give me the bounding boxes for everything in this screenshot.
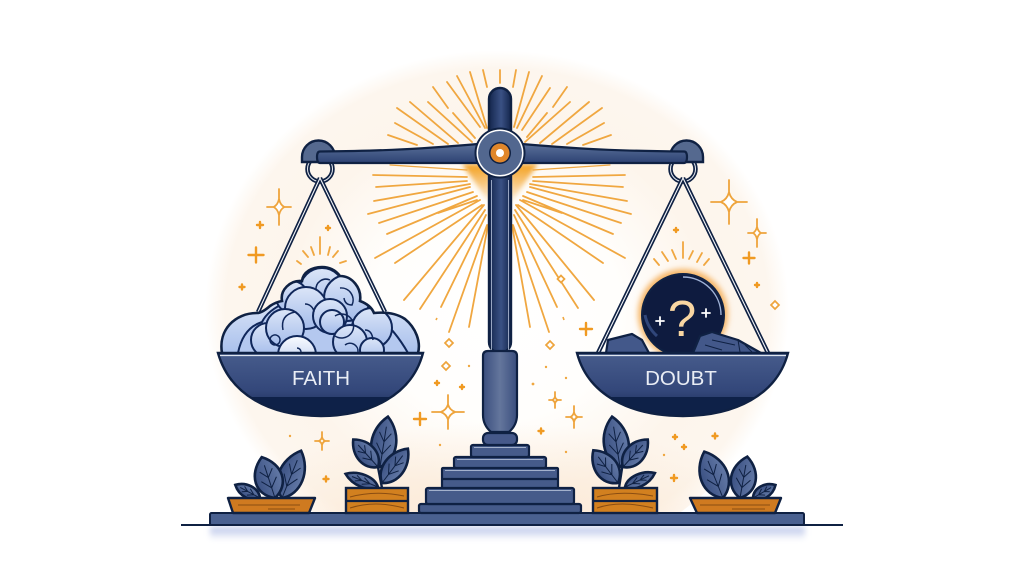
right pan (570, 353, 795, 419)
cloud outline (221, 267, 419, 353)
left hanger ring and cap (302, 140, 335, 182)
rocks (606, 332, 761, 353)
doubt orb glow (638, 269, 728, 359)
ground line (181, 524, 843, 526)
plant: inner right box (584, 415, 658, 513)
right cords (598, 178, 768, 353)
faith cloud (220, 266, 420, 352)
pedestal steps (419, 445, 581, 513)
central post (489, 88, 511, 353)
base plinth (210, 513, 804, 525)
post collar (483, 351, 517, 432)
doubt rays (654, 242, 709, 265)
cloud silhouette (221, 267, 419, 353)
scale stand (181, 88, 843, 525)
left pan (210, 353, 430, 419)
ground shadow (210, 527, 805, 540)
post highlights (492, 180, 508, 350)
right hanger ring and cap (670, 140, 703, 182)
inner puffs (237, 268, 408, 352)
question mark: ? (668, 290, 696, 347)
balance beam (317, 144, 687, 163)
faith label: FAITH (292, 367, 350, 390)
left cords (258, 178, 385, 312)
plant: far right tray (690, 447, 781, 513)
sparkles (240, 180, 779, 482)
faith rays (297, 237, 346, 264)
post foot (483, 433, 517, 445)
central hub (474, 128, 526, 178)
plant: far left tray (228, 446, 315, 513)
doubt label: DOUBT (645, 367, 717, 390)
plant: inner left box (343, 415, 416, 513)
radiating sun rays (368, 70, 631, 332)
doubt orb (642, 274, 724, 356)
background glow (214, 58, 780, 512)
